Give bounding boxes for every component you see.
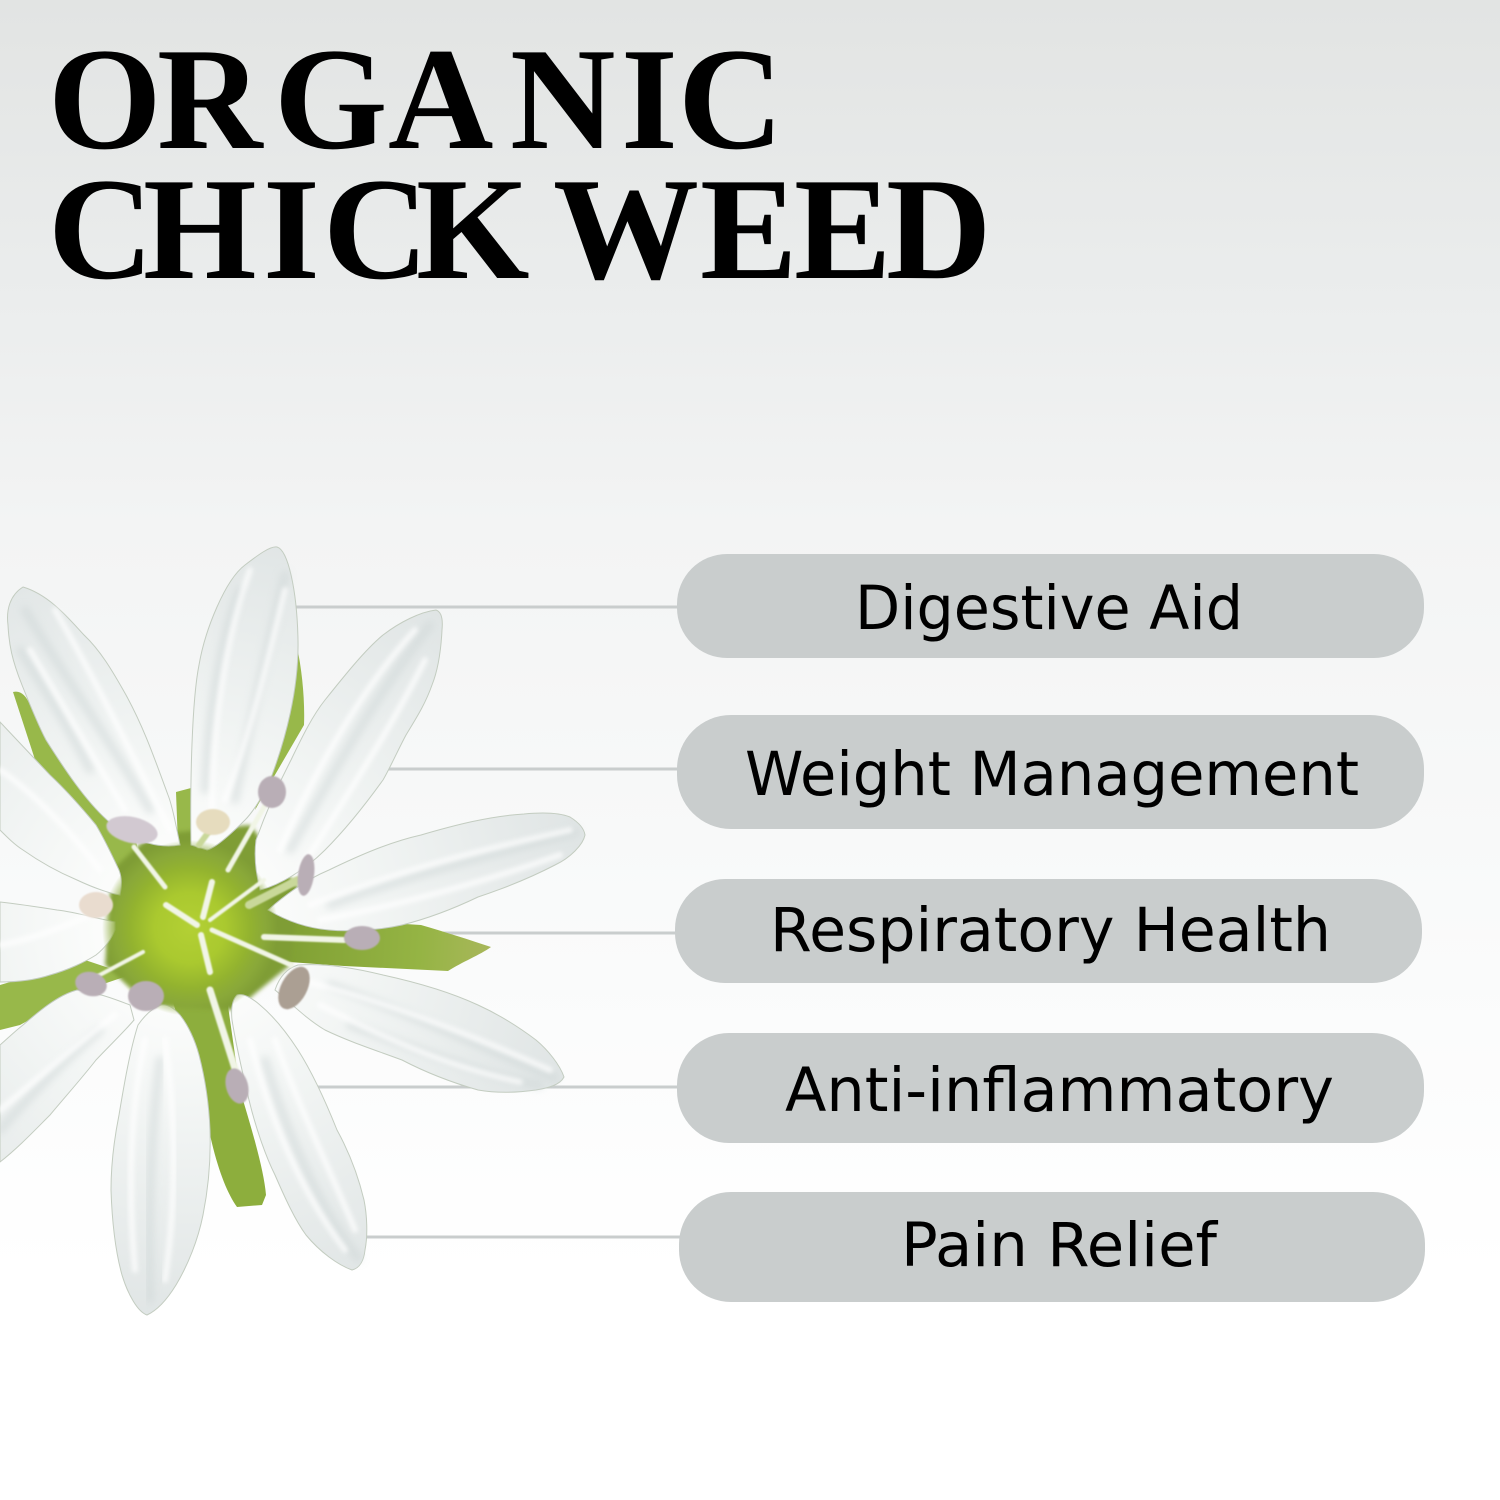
title: ORGANIC (48, 18, 783, 180)
stamen filaments (96, 800, 344, 1075)
center disc (102, 840, 278, 1016)
petal: right (268, 813, 585, 931)
flower illustration (0, 547, 585, 1315)
anthers (72, 776, 380, 1106)
petal: bottom right (232, 995, 367, 1270)
pill: Weight Management: Weight Management (745, 739, 1359, 810)
pill: Pain Relief: Pain Relief (901, 1210, 1219, 1281)
title (48, 18, 991, 310)
pill: Weight Management (677, 715, 1424, 829)
petal: bottom (111, 1005, 210, 1315)
petal: top (191, 547, 298, 850)
title: CHICKWEED (48, 148, 991, 310)
pill: Anti-inflammatory: Anti-inflammatory (785, 1055, 1334, 1126)
green sepals (0, 647, 491, 1207)
petals (0, 547, 585, 1315)
petal veins (0, 570, 575, 1300)
pill: Digestive Aid: Digestive Aid (855, 573, 1243, 644)
petal: lower right (275, 965, 564, 1092)
pill: Anti-inflammatory (677, 1033, 1424, 1143)
olive base behind petals (105, 825, 300, 1010)
petal: upper far left (0, 722, 121, 895)
pill: Digestive Aid (677, 554, 1424, 658)
pill: Pain Relief (679, 1192, 1425, 1302)
petal: upper left (8, 587, 180, 846)
petal: lower left (0, 990, 134, 1162)
petal: upper right (255, 610, 442, 890)
petal: left (0, 902, 115, 982)
pill: Respiratory Health: Respiratory Health (770, 895, 1331, 966)
connector lines (296, 607, 682, 1237)
pill: Respiratory Health (675, 879, 1422, 983)
